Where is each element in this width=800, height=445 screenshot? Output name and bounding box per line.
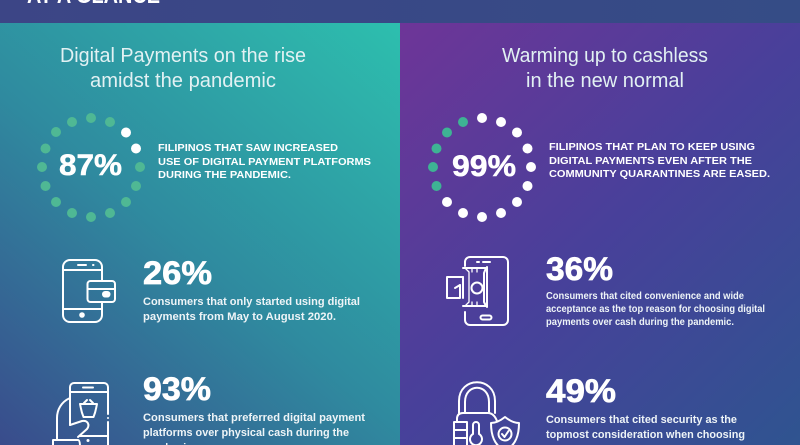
caption: keep using <box>549 142 770 180</box>
heading: in the new normal <box>526 70 684 92</box>
description: payments from May to August 2020. <box>143 311 336 323</box>
icon: phone with card <box>63 260 115 322</box>
description: topmost consideration when choosing <box>546 429 745 441</box>
stat: 93%: 93% <box>143 371 211 407</box>
description: acceptance as the top reason for choosing digital <box>546 304 765 315</box>
stat: 26% <box>143 255 360 323</box>
caption: increased use: FILIPINOS THAT SAW INCREASED <box>158 143 338 154</box>
icon: padlock with shield <box>454 382 519 445</box>
stat 99%: 99% <box>452 150 516 183</box>
caption: increased use: DURING THE PANDEMIC. <box>158 170 291 181</box>
description: payments over cash during the pandemic. <box>546 317 734 328</box>
caption: increased use: USE OF DIGITAL PAYMENT PLATFORMS <box>158 157 371 168</box>
icon: phone dispensing banknote <box>447 257 508 325</box>
description <box>545 414 745 445</box>
description: Consumers that preferred digital payment <box>143 412 365 424</box>
heading: Warming up to cashless <box>502 45 708 67</box>
stat: 49% <box>545 373 745 445</box>
caption: increased use <box>158 143 371 181</box>
heading: Digital Payments on the rise <box>60 45 306 67</box>
stat: 49%: 49% <box>546 373 616 409</box>
caption: keep using: DIGITAL PAYMENTS EVEN AFTER THE <box>549 156 752 167</box>
header band <box>0 0 800 23</box>
description: platforms over physical cash during the <box>143 427 349 439</box>
panel: warming up to cashless <box>400 23 800 445</box>
description <box>143 296 360 323</box>
icon: hand holding phone with basket <box>53 383 109 445</box>
description <box>546 291 765 328</box>
description <box>143 412 365 445</box>
stat: 36%: 36% <box>546 251 613 287</box>
description: Consumers that only started using digital <box>143 296 360 308</box>
dot ring: 99% <box>428 113 536 222</box>
dot ring: 87% <box>37 113 145 222</box>
stat: 93% <box>143 371 365 445</box>
stat: 36% <box>546 251 765 328</box>
heading <box>502 45 708 92</box>
panel: digital payments on the rise <box>0 23 400 445</box>
heading <box>60 45 306 92</box>
description: Consumers that cited convenience and wide <box>546 291 744 302</box>
caption: keep using: FILIPINOS THAT PLAN TO KEEP USING <box>549 142 755 153</box>
description: Consumers that cited security as the <box>546 414 737 426</box>
caption: keep using: COMMUNITY QUARANTINES ARE EASED. <box>549 169 770 180</box>
stat: 26%: 26% <box>143 255 212 291</box>
heading: amidst the pandemic <box>90 70 276 92</box>
stat 87%: 87% <box>59 149 122 182</box>
